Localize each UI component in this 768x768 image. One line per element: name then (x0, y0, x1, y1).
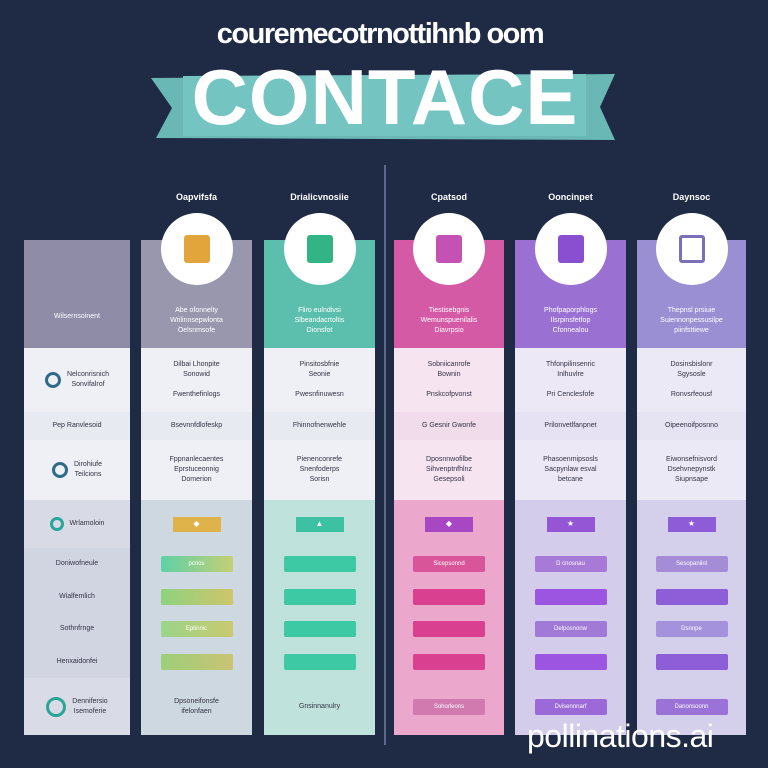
column 4: Dvisennnarf (554, 704, 586, 710)
column 4: Ilsrpinsfetfop (551, 317, 590, 324)
column 1: Dpsoneifonsfe (174, 698, 219, 704)
column 3: Pnskcofpvonst (426, 391, 472, 398)
column 5: Siupnsape (675, 476, 708, 483)
row icon: 1: Nelconrisnich (67, 371, 109, 378)
column 4: Cfonnealou (553, 327, 588, 334)
column 1: Sonowid (183, 371, 210, 378)
column 5: Thepnsl prsiuie (668, 307, 715, 314)
icon (413, 213, 485, 285)
column 5: Oipeenoifposnno (665, 422, 718, 429)
column 2: Dionsfot (307, 327, 332, 334)
column 2: Pinsitosbfnie (300, 361, 339, 368)
column 5: Dsnnpe (681, 626, 702, 632)
column 4: Phofpaporphlogs (544, 307, 597, 314)
column 1: Domerion (181, 476, 212, 483)
column 1: Eprstuceonnig (174, 466, 219, 473)
icon (160, 213, 232, 285)
column: labels: Teilcions (75, 471, 101, 478)
column 1: ifelonfaen (181, 708, 212, 714)
column 2: Snenfoderps (300, 466, 339, 473)
column 3 (394, 240, 504, 735)
text: Drialicvnosiie (290, 192, 349, 202)
column 2: Sorisn (310, 476, 329, 483)
column: labels: Isemoferie (74, 708, 106, 714)
column 1: Fwenthefinlogs (173, 391, 220, 398)
icon (284, 213, 356, 285)
column 3: Diavrpsio (434, 327, 464, 334)
column 4: Delposnonw (554, 626, 587, 632)
column 5: Dsehvnepynstk (668, 466, 715, 473)
column 5: Ronvsrfeousf (671, 391, 712, 398)
column 4 (515, 240, 626, 735)
column 4: D cnosnau (556, 561, 585, 567)
column 2: Seonie (309, 371, 330, 378)
site title: couremecotrnottihnb oom (217, 18, 543, 50)
column 3: G Gesnir Gwonfe (422, 422, 476, 429)
column 3: Dposnnwofilbe (426, 456, 472, 463)
column 5: Sesopaniinl (676, 561, 707, 567)
column 3: Wemunspuenilalis (421, 317, 477, 324)
column 1: Eptinnic (186, 626, 207, 632)
column 5: Sgysosle (677, 371, 706, 378)
column 1: Fppnanlecaentes (170, 456, 223, 463)
column 4: Inlhuvlre (557, 371, 584, 378)
column 1: Wrilinnsepwlonta (170, 317, 223, 324)
column 3: ◆ (446, 519, 452, 528)
icon (656, 213, 728, 285)
column 4: ★ (567, 519, 574, 528)
column 4: Pri Cenclesfofe (547, 391, 594, 398)
column 2: Fliro eulndivsi (298, 307, 341, 314)
column 5 (637, 240, 746, 735)
ribbon banner (151, 74, 615, 140)
column 1: Dilbai Lhonpite (173, 361, 220, 368)
text: Daynsoc (673, 192, 710, 202)
column 5: Danonsoonn (674, 704, 709, 710)
text: Ooncinpet (548, 192, 593, 202)
column 2: Slbeandacrtoltis (295, 317, 344, 324)
column: labels (24, 240, 130, 735)
column 5: Dosinsbislonr (670, 361, 713, 368)
column 2 (264, 240, 375, 735)
column: labels: Wrlamoloin (70, 520, 104, 527)
text: Oapvifsfa (176, 192, 217, 202)
column 4: Prilonvetlfanpnet (544, 422, 597, 429)
column: labels: Doniwofneule (56, 560, 98, 567)
column 3: Sihvenptnfhlnz (426, 466, 472, 473)
column: labels: Pep Ranvlesoid (52, 422, 102, 429)
column 1: pcnos (188, 561, 204, 567)
column: labels: Wilsernsoinent (54, 313, 100, 320)
column 4: Thfonpilinsenric (546, 361, 595, 368)
main heading: CONTACE (192, 53, 578, 141)
column: labels: Dennifersio (72, 698, 108, 704)
column 4: Phasoenmipsosls (543, 456, 598, 463)
column 5: piinfsttiewe (674, 327, 709, 334)
column 4: betcane (558, 476, 583, 483)
column 3: Sicepsonnd (433, 561, 465, 567)
column 2: Pwesnfinuwesn (295, 391, 344, 398)
column 2: ▲ (316, 519, 323, 528)
column 3: Bownin (438, 371, 460, 378)
column 3: Tiestisebgnis (429, 307, 469, 314)
column 1: Oelsnmsofe (178, 327, 215, 334)
column 2: Pienenconrefe (297, 456, 342, 463)
column 3: Sohorleons (434, 704, 464, 710)
icon (534, 213, 606, 285)
column 4: Sacpynlaw esval (544, 466, 597, 473)
column: labels: Henxaidonfei (57, 658, 97, 665)
row icon: 1: Sonvifalrof (71, 381, 105, 388)
column 3: Gesepsoli (433, 476, 465, 483)
column 1 (141, 240, 252, 735)
column: labels: Sothnfrnge (60, 625, 94, 632)
column: labels: Dirohiufe (74, 461, 102, 468)
column 2: Fhinnofnenwehle (293, 422, 346, 429)
column 3: Sobniicanrofe (428, 361, 470, 368)
column 5: ★ (688, 519, 695, 528)
divider (384, 165, 386, 745)
row icon: 1 (24, 348, 130, 412)
column 5: Suiennonpessusilpe (660, 317, 723, 324)
column 1: ◆ (193, 519, 200, 528)
text: Cpatsod (431, 192, 467, 202)
column 5: Eiwonsefnisvord (666, 456, 717, 463)
column 1: Abe ofonnelty (175, 307, 218, 314)
column 2: Gnsinnanulry (299, 702, 340, 710)
column 1: Bsevnnfdlofeskp (171, 422, 222, 429)
watermark: pollinations.ai (527, 718, 713, 754)
column: labels: Wialfemlich (59, 593, 95, 600)
